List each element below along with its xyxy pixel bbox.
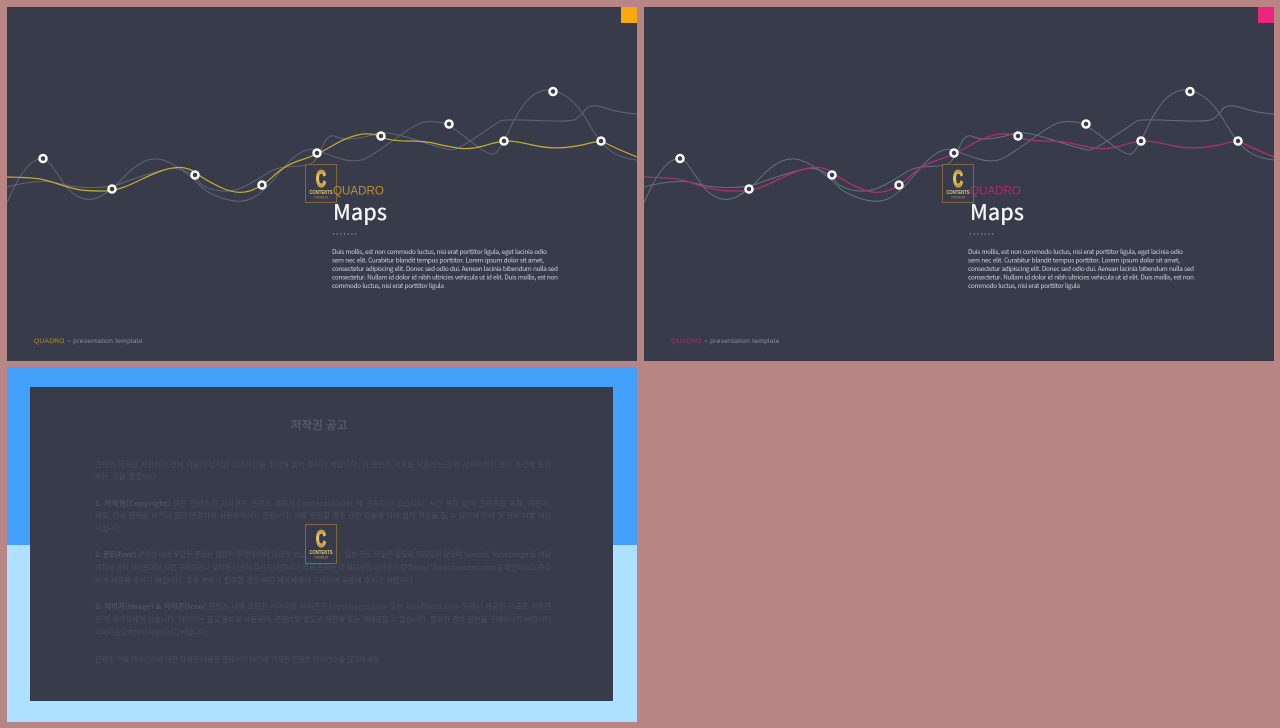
chart: data point markers (676, 88, 1242, 192)
text block: intro paragraph: 콘텐츠 자료를 사용하기 전에 다음의 법적인 유의사항을 주의해 읽어 주시기 바랍니다. 이 콘텐츠 자료를 사용하는 것은 사용자께서 상기 조건에 동의 (95, 460, 551, 470)
text block: intro paragraph (95, 460, 551, 482)
text block: body copy: commodo luctus, nisi erat porttitor ligula (968, 280, 1080, 290)
text block: body copy (968, 246, 1194, 290)
heading: Maps: Maps (970, 196, 1024, 227)
panel: slide 1 orange Maps (7, 7, 637, 361)
text block: section 2 (95, 550, 551, 586)
icon: gold contents logo: C (953, 166, 963, 193)
text block: body copy: sem nec elit. Curabitur blandit tempus porttitor. Lorem ipsum dolor sit amet, (332, 254, 544, 264)
dark notice card (30, 387, 613, 701)
light blue background lower (7, 545, 637, 722)
chart: line group (644, 88, 1274, 203)
icon: gold contents logo (942, 164, 974, 202)
icon: gold contents logo: C (316, 166, 326, 193)
chart: grey line B (644, 106, 1274, 191)
panel: slide 3 copyright notice (7, 367, 637, 722)
text block: section 3: 은 각 제작자에게 있습니다. 이미지는 참고 용도로 사용되며, 콘텐츠와 별도로 재판매 또는 재배포할 수 없습니다. 필요한 경우 원본을 구매하시기 바랍니다 (95, 615, 551, 625)
blue background upper (7, 367, 637, 545)
heading: copyright notice: 저작권 공고 (291, 417, 348, 433)
icon: gold contents logo: CONTENTS (310, 550, 333, 556)
icon: gold contents logo (306, 164, 336, 202)
chart: data point markers (40, 88, 604, 192)
icon: orange corner square (621, 7, 637, 23)
text block: closing line: 콘텐츠 자료 라이선스에 대한 자세한 내용은 홈페이지 하단에 기재된 콘텐츠 라이선스를 참고하세요. (95, 655, 381, 665)
icon: gold contents logo: CONTENTS (310, 190, 333, 196)
label: QUADRO: QUADRO (970, 184, 1021, 198)
divider dots (970, 233, 995, 235)
icon: gold contents logo: PREMIUM (314, 556, 328, 560)
text block: section 3 (95, 602, 551, 638)
chart: grey line B (7, 106, 637, 191)
footer: QUADRO ~ presentation template (671, 338, 780, 345)
text block: body copy: Duis mollis, est non commodo luctus, nisi erat porttitor ligula, eget lacinia odio (332, 246, 547, 256)
text block: body copy (332, 246, 558, 290)
chart: yellow line (7, 134, 637, 192)
text block: body copy: consectetur. Nullam id dolor id nibh ultricies vehicula ut id elit. Duis mollis, est non (332, 272, 558, 282)
divider dots (333, 233, 358, 235)
icon: pink corner square (1258, 7, 1274, 23)
text block: section 3: 3. 이미지(Image) & 아이콘(Icon) 콘텐츠 내에 포함된 이미지와 아이콘은 FreeImages.com 또는 Iconfinder.com 등에서 제공된 자료로 저작권 (95, 602, 551, 612)
text block: section 1: 이 됩니다. (95, 524, 121, 534)
icon: gold contents logo: PREMIUM (314, 196, 328, 200)
chart: grey line A (7, 90, 637, 203)
chart: grey line A (644, 90, 1274, 203)
text block: section 2: 하여 사용해 주시기 바랍니다. 유료 폰트가 필요할 경우 해당 제작사에서 구매하여 사용해 주시기 바랍니다. (95, 576, 415, 586)
text block: body copy: Duis mollis, est non commodo luctus, nisi erat porttitor ligula, eget lacinia odio (968, 246, 1183, 256)
text block: body copy: consectetur adipiscing elit. Donec sed odio dui. Aenean lacinia bibendum nulla sed (968, 263, 1194, 273)
text block: body copy: sem nec elit. Curabitur blandit tempus porttitor. Lorem ipsum dolor sit amet, (968, 254, 1180, 264)
icon: gold contents logo (306, 524, 336, 564)
icon: gold contents logo: PREMIUM (951, 196, 965, 200)
icon: gold contents logo: C (316, 526, 326, 553)
text block: section 1: 1. 저작권(Copyright) 모든 콘텐츠의 저작권은 콘텐츠 제작자 ContentsMaker 에 귀속되어 있습니다. 사전 동의 없이 콘텐츠를 복제, 재판매, (95, 499, 551, 509)
text block: section 2: 제작사 공식 사이트에서 직접 구매하거나 설치해 사용해 주시기 바랍니다. 무료 폰트는 각 제작사의 라이선스 정책(http://fonts.contents.com)을 확인하시고 준수 (95, 563, 551, 573)
heading: Maps: Maps (333, 196, 387, 227)
footer: QUADRO ~ presentation template (34, 338, 143, 345)
text block: intro paragraph: 하는 것을 말합니다. (95, 472, 159, 482)
text block: section 3: 이미지를 교체하여 사용하시기 바랍니다. (95, 628, 207, 638)
chart: pink line (644, 134, 1274, 192)
text block: section 1 (95, 499, 551, 534)
text block: body copy: commodo luctus, nisi erat porttitor ligula (332, 280, 444, 290)
panel: slide 2 pink Maps (644, 7, 1274, 361)
text block: section 1: 배포, 전송 행위를 하거나 임의 변경하여 사용하여서는 안됩니다. 이를 위반할 경우 관련 법률에 따라 법적 책임을 질 수 있으며 민사 및 형사 처벌 대상 (95, 511, 551, 521)
icon: gold contents logo: CONTENTS (946, 190, 970, 196)
text block: body copy: consectetur adipiscing elit. Donec sed odio dui. Aenean lacinia bibendum nulla sed (332, 263, 558, 273)
text block: section 2: 2. 폰트(Font) 콘텐츠 내에 포함된 폰트는 컴퓨터 환경에 따라 다르게 보일 수 있습니다. 일부 폰트 파일은 별도로 제공되지 않으며 Sandoll, Yoondesign 등 해당 (95, 550, 551, 560)
text block: body copy: consectetur. Nullam id dolor id nibh ultricies vehicula ut id elit. Duis mollis, est non (968, 272, 1194, 282)
label: QUADRO: QUADRO (333, 184, 384, 198)
